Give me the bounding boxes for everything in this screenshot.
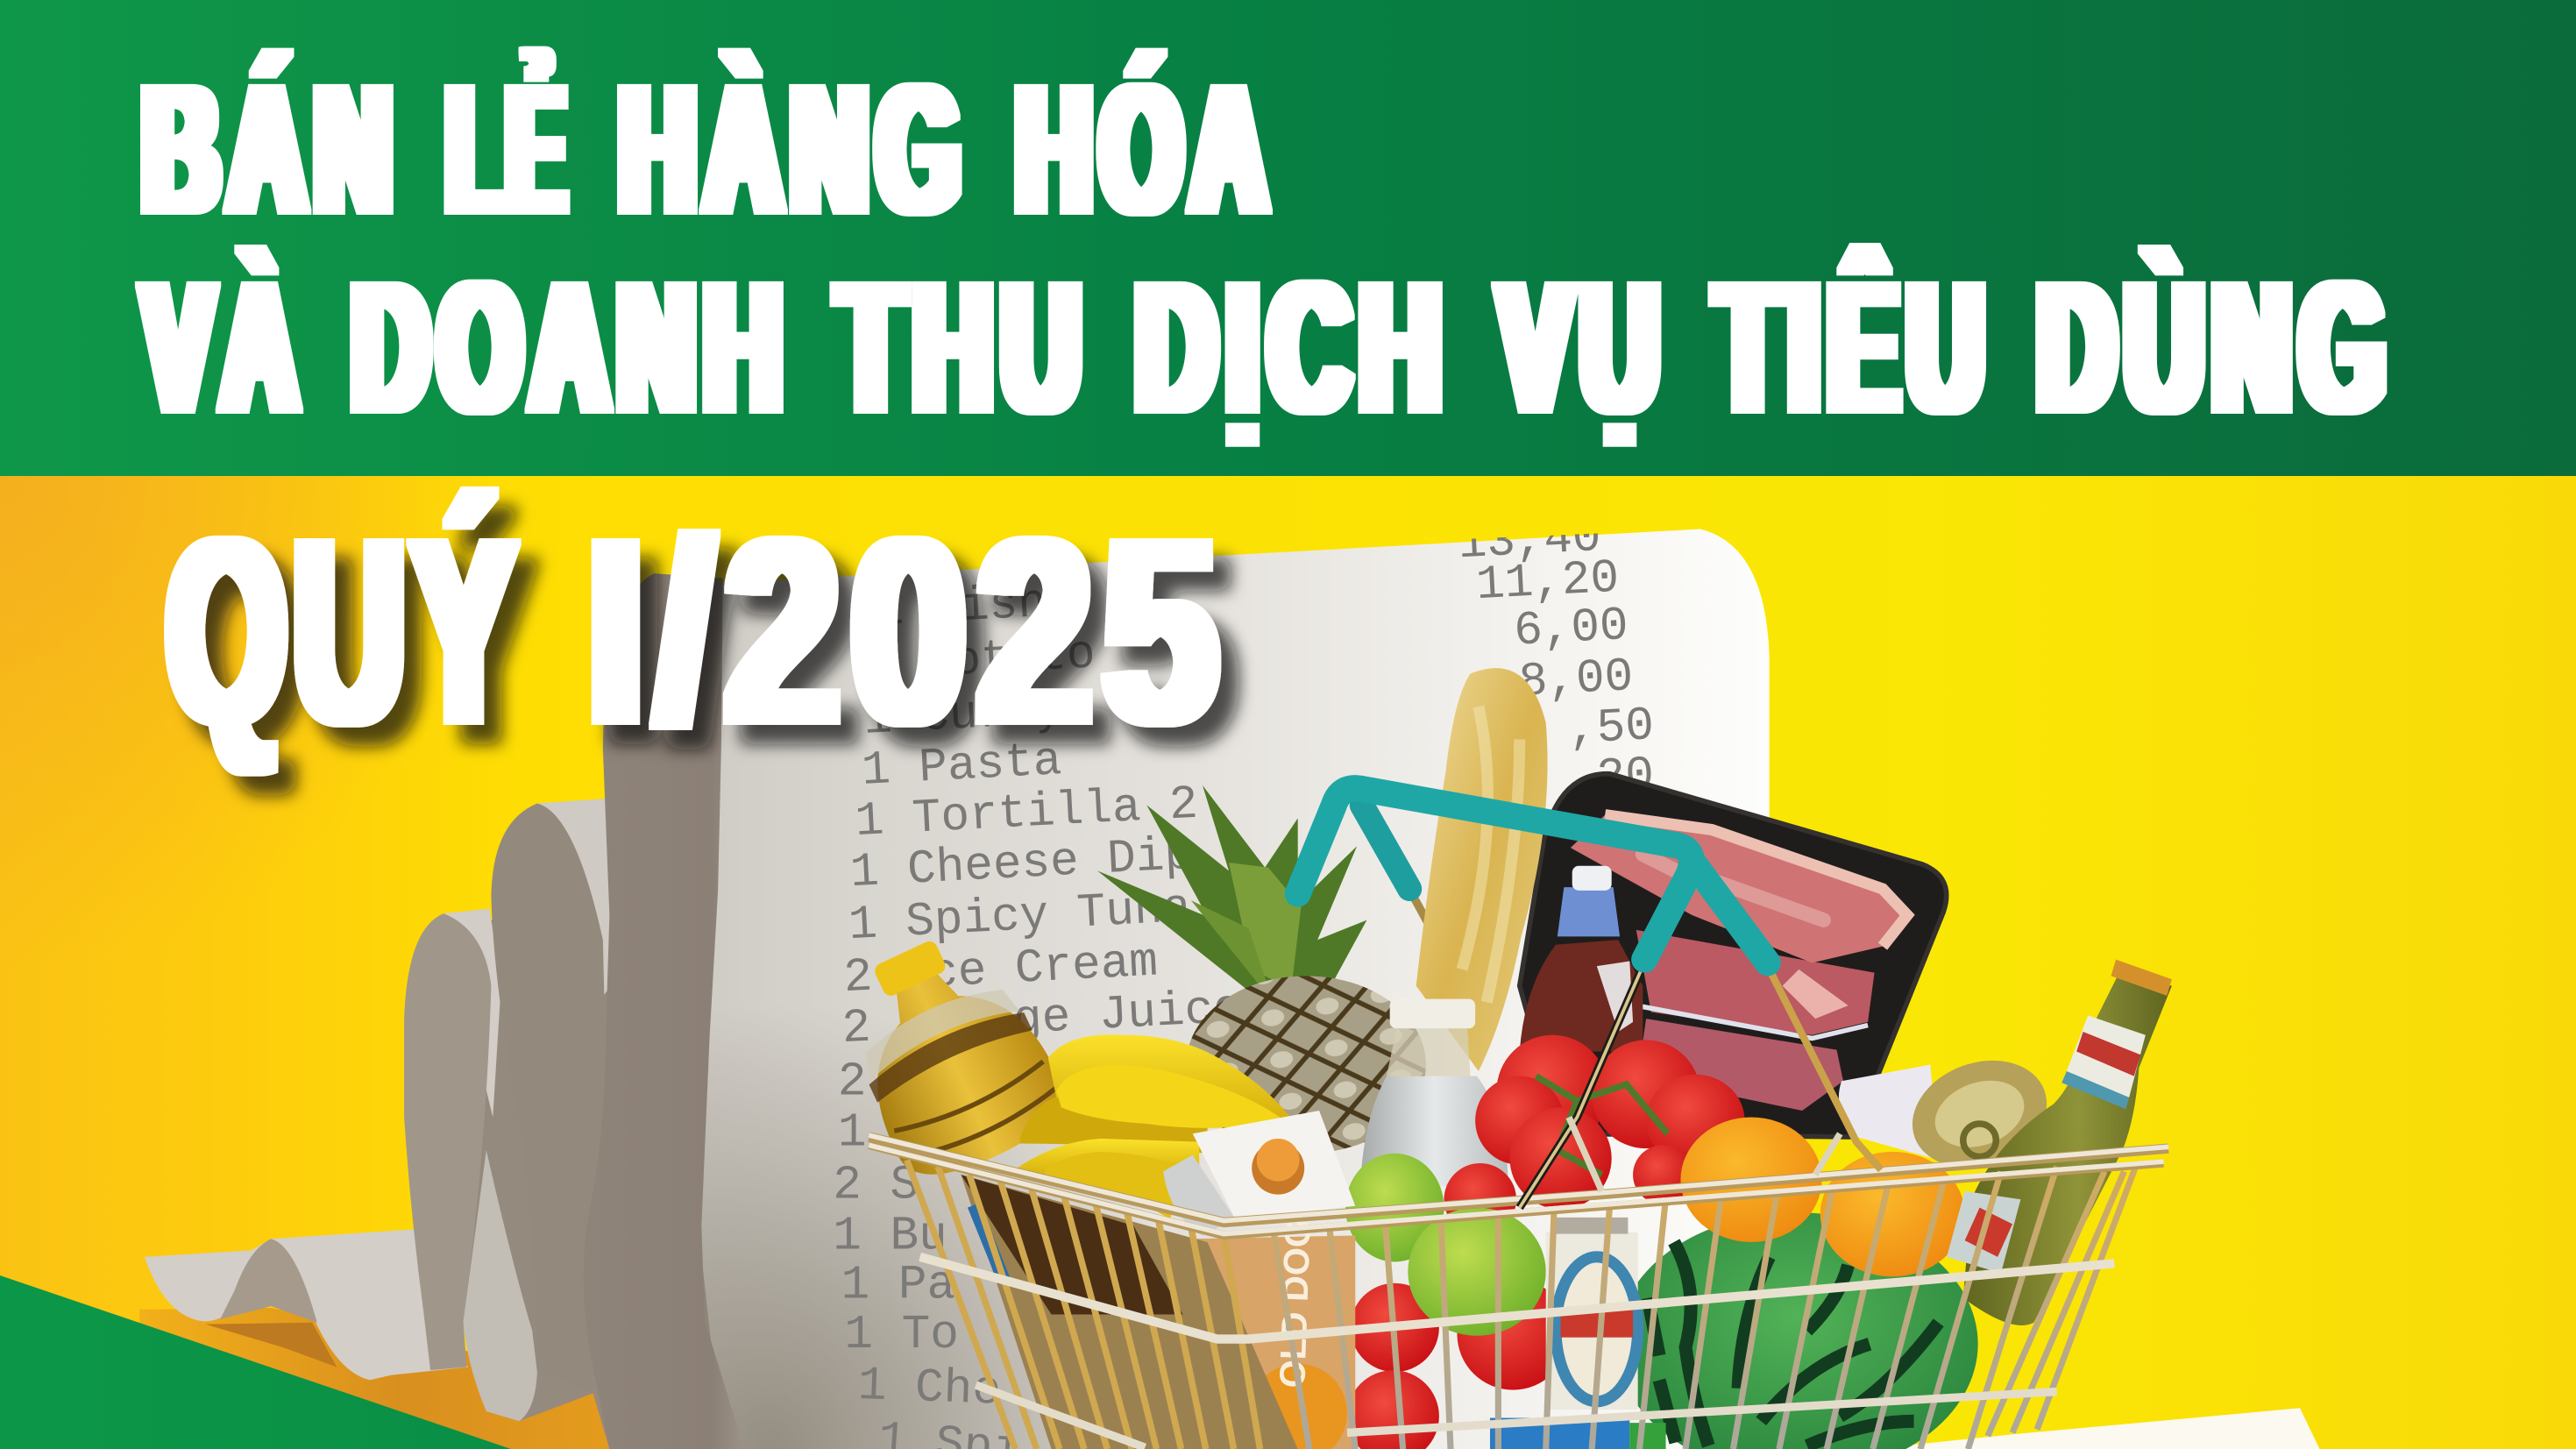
receipt printed text: 2 Orange Juice: [841, 982, 1243, 1056]
receipt printed text: 1 Curry: [862, 684, 1065, 748]
receipt roll: silhouette: [464, 904, 744, 1449]
basket handle wires: [1520, 966, 1881, 1208]
title line 2: DỊCH: [1136, 244, 1451, 451]
title line 2: VỤ: [1500, 244, 1669, 451]
subtitle: period: [167, 486, 1230, 778]
title line 1: LẺ: [448, 48, 572, 252]
receipt roll: back curl: [404, 908, 501, 1370]
tomatoes: [1347, 1035, 1745, 1449]
milk bottle: [1360, 999, 1508, 1186]
teal basket handle: [1298, 788, 1768, 962]
oil bottle: [821, 915, 1077, 1194]
floor paper at bottom right: [1870, 1408, 2320, 1449]
juice carton: [1163, 1111, 1355, 1449]
receipt printed text: 2 Ice Cream: [842, 935, 1160, 1005]
receipt printed text: 1 Bu: [833, 1210, 947, 1263]
baguette: [1416, 668, 1548, 1071]
receipt roll: middle curl: [464, 799, 611, 1421]
receipt printed text: ,50: [1567, 700, 1656, 757]
green apples: [1345, 1154, 1546, 1336]
carton label: OLD DOG: [1272, 1218, 1318, 1389]
title line 2: VÀ: [144, 244, 307, 451]
title line 1: BÁN: [143, 48, 401, 252]
receipt printed text: 2: [838, 1055, 867, 1109]
receipt printed text: 1 Fish: [874, 577, 1047, 639]
bananas: [1011, 1034, 1293, 1219]
subtitle: period: I/2025: [587, 486, 1230, 778]
receipt printed text: 1 Che: [857, 1360, 1002, 1418]
watermelon: [1616, 1212, 1978, 1449]
receipt main sheet: [690, 529, 1770, 1449]
receipt printed text: ,20: [1567, 749, 1656, 806]
beer bottle: [1947, 960, 2172, 1325]
subtitle: period: QUÝ: [167, 486, 523, 778]
receipt printed text: 8,00: [1517, 650, 1635, 710]
beer can: [1490, 1218, 1666, 1449]
title line 1: [143, 48, 1276, 252]
meat steaks: [1641, 1019, 1843, 1111]
oranges: [1680, 1118, 1965, 1276]
receipt dark fold: [584, 573, 744, 1449]
title: [143, 48, 2395, 451]
receipt printed text: 1 Pasta: [861, 735, 1063, 799]
background: yellow: [0, 473, 2576, 1449]
receipt printed text: 2 S: [833, 1159, 919, 1212]
receipt printed text: 1 Spicy Tuna: [848, 882, 1193, 953]
basket handle rear legs: [1362, 805, 1443, 949]
tomato vine: [1536, 1076, 1667, 1175]
receipt printed text: 2 Potato: [865, 628, 1096, 693]
receipt printed text: 1 Pa: [841, 1260, 955, 1313]
receipt printed text: 1 To: [844, 1309, 959, 1362]
basket wires: front face: [1274, 1167, 2136, 1449]
receipt printed text: 13,40: [1457, 511, 1602, 572]
meat tray: [1520, 774, 1947, 1137]
title line 2: DOANH: [352, 244, 791, 451]
header band: [0, 0, 2576, 476]
title line 2: [144, 244, 2395, 451]
receipt printed text: 1 Tortilla 2: [854, 778, 1199, 849]
sauce bottle: [1520, 866, 1643, 1052]
receipt printed text: [833, 511, 1656, 1449]
title line 1: HÓA: [1017, 48, 1276, 252]
receipt printed text: 1: [838, 1106, 867, 1160]
title line 2: TIÊU: [1716, 244, 1993, 451]
receipt printed text: 6,00: [1513, 600, 1629, 659]
green corner triangle: [0, 1275, 511, 1449]
paper ribbon on the floor: [145, 1229, 468, 1380]
title line 2: THU: [838, 244, 1090, 451]
floor shadow: [139, 1308, 657, 1449]
basket rails: [869, 1135, 2168, 1447]
tin can: [1839, 1042, 2062, 1185]
receipt printed text: 11,20: [1475, 552, 1621, 613]
title line 1: HÀNG: [620, 48, 969, 252]
basket wires: side face: [907, 1160, 1260, 1449]
receipt printed text: 1 Cheese Dip: [849, 829, 1195, 900]
illustration: receipt and shopping basket: [139, 511, 2320, 1449]
basket side goods: [961, 1175, 1298, 1449]
sheet lower shading: [690, 986, 1347, 1449]
pineapple: [1097, 785, 1426, 1154]
